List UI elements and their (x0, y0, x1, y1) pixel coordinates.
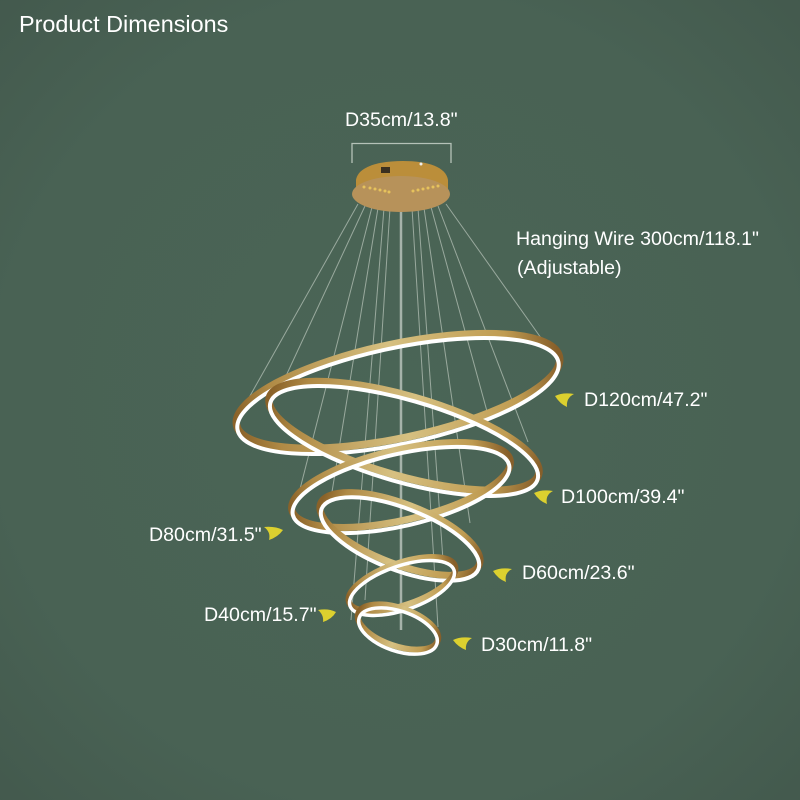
pointer icon D40 (318, 609, 336, 622)
pointer icon D120 (555, 393, 574, 407)
label D100: D100cm/39.4" (561, 486, 685, 508)
ring D40 (342, 546, 462, 627)
label D60: D60cm/23.6" (522, 562, 635, 584)
hanging wire label: (Adjustable) (517, 257, 622, 279)
ceiling canopy (352, 161, 450, 212)
hanging wires (246, 204, 546, 627)
pointer icon D60 (493, 568, 512, 582)
pointer icon D100 (534, 490, 553, 504)
ring D80 (284, 426, 518, 550)
label D30: D30cm/11.8" (481, 634, 592, 656)
pointer icon D30 (453, 637, 472, 650)
ring D30 (352, 595, 444, 663)
pointer icon D80 (264, 527, 283, 540)
title: Product Dimensions (19, 11, 228, 37)
label D120: D120cm/47.2" (584, 389, 708, 411)
canopy width bracket (352, 144, 451, 163)
ring D60 (310, 476, 490, 598)
hanging wire label (516, 228, 759, 279)
canopy dimension label: D35cm/13.8" (345, 109, 458, 131)
ring D100 (258, 359, 550, 519)
label D80: D80cm/31.5" (149, 524, 262, 546)
hanging wire label: Hanging Wire 300cm/118.1" (516, 228, 759, 250)
ring D120 (227, 311, 569, 477)
central support wire (400, 208, 402, 630)
label D40: D40cm/15.7" (204, 604, 317, 626)
